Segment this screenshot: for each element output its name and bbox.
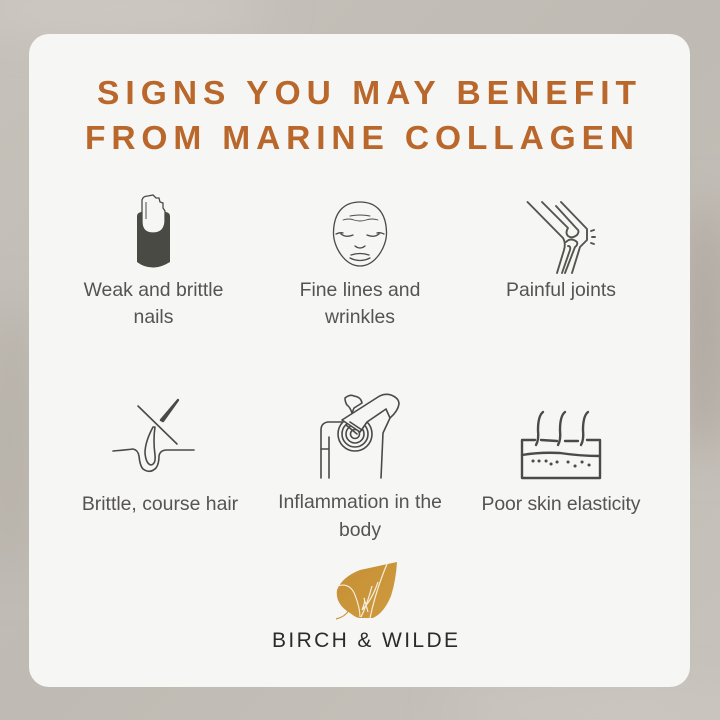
label: inflammation: body bbox=[339, 519, 381, 541]
title: SIGNS YOU MAY BENEFIT bbox=[97, 75, 637, 112]
title: FROM MARINE COLLAGEN bbox=[85, 120, 634, 157]
icon: brittle nail bbox=[137, 195, 170, 268]
label: skin: Poor skin elasticity bbox=[482, 493, 641, 515]
title bbox=[85, 75, 637, 157]
label: fine lines bbox=[300, 279, 420, 328]
label: nails bbox=[84, 279, 223, 328]
label: fine lines: wrinkles bbox=[324, 306, 395, 328]
label: nails: Weak and brittle bbox=[84, 279, 223, 301]
icon: knee joint bbox=[528, 202, 595, 273]
logo: wordmark: BIRCH & WILDE bbox=[272, 629, 458, 652]
label: inflammation bbox=[278, 491, 442, 541]
label: joints: Painful joints bbox=[506, 279, 616, 301]
label: nails: nails bbox=[134, 306, 173, 328]
label: fine lines: Fine lines and bbox=[300, 279, 420, 301]
logo: leaf bbox=[336, 562, 397, 619]
label: inflammation: Inflammation in the bbox=[278, 491, 442, 513]
label: hair: Brittle, course hair bbox=[82, 493, 239, 515]
icon: body inflammation bbox=[321, 394, 399, 478]
icon: skin layers bbox=[522, 412, 600, 478]
icon: face with wrinkles bbox=[333, 202, 387, 266]
icon: brittle hair bbox=[113, 400, 194, 471]
